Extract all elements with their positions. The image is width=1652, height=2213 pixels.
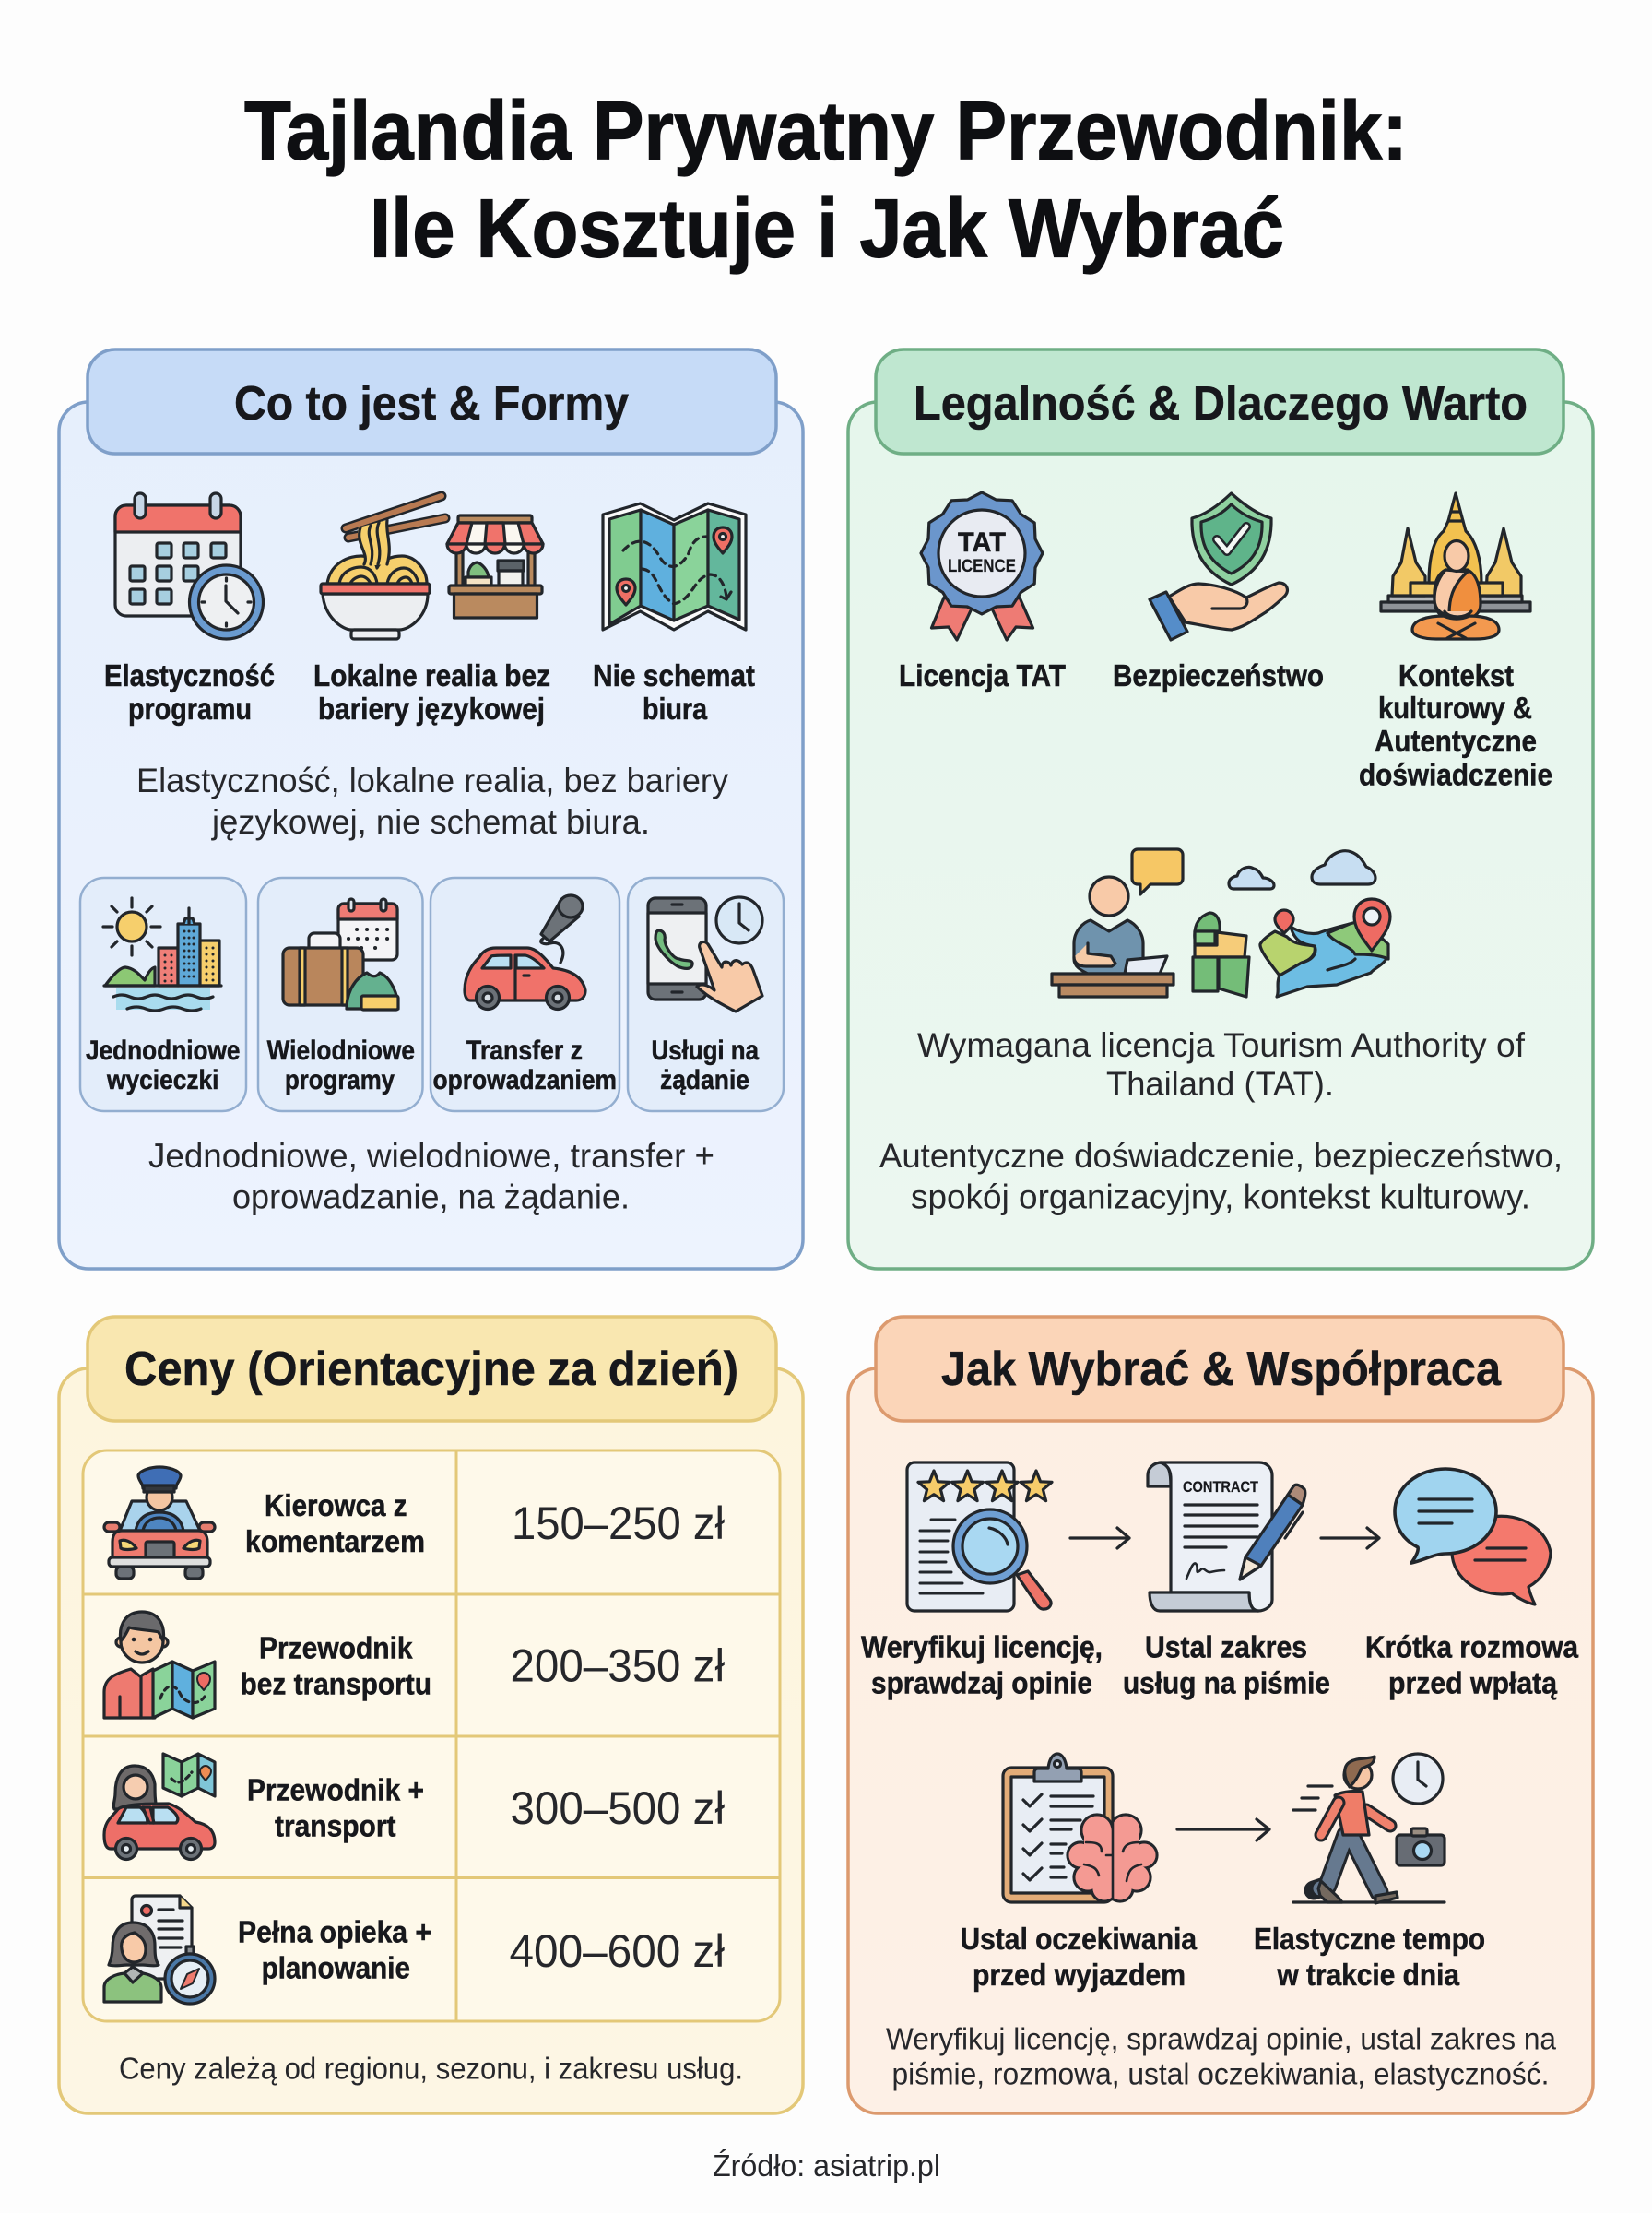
price: 400–600 zł [509,1925,725,1977]
label: Jednodniowe [86,1035,240,1066]
text block: forms summary 1: językowej, nie schemat biura. [211,803,650,841]
text block: forms summary 1: Elastyczność, lokalne realia, bez bariery [136,762,728,799]
label: Ustal oczekiwania przed wyjazdem [961,1922,1198,1992]
label [247,1772,424,1842]
label: Elastyczność programu: programu [128,692,252,726]
label: Licencja TAT: Licencja TAT [899,658,1066,692]
icon: contract with pen [1148,1462,1305,1611]
icon: phone, clock and hand [648,897,762,1012]
arrow [1177,1819,1269,1840]
label: żądanie [660,1065,749,1095]
arrow [1321,1528,1379,1548]
row: Pełna opieka + planowanie [104,1896,725,2004]
label: Elastyczne tempo w trakcie dnia: w trakcie dnia [1277,1958,1460,1992]
label: Lokalne realia bez bariery językowej: bariery językowej [318,692,545,726]
icon: suitcase, calendar and bag [283,899,398,1010]
icon: speech bubbles [1395,1469,1551,1604]
title [244,85,1408,275]
text block: forms summary 2: oprowadzanie, na żądanie. [232,1178,630,1215]
heading: Ceny (Orientacyjne za dzień): Ceny (Orientacyjne za dzień) [124,1343,738,1396]
panel: Co to jest & Formy [59,349,803,1269]
label: Nie schemat biura: biura [643,692,708,726]
label: oprowadzaniem [433,1065,617,1095]
icon: contract with pen: CONTRACT [1183,1478,1259,1496]
text block: forms summary 2 [148,1137,714,1215]
label [433,1035,617,1095]
row: Kierowca z komentarzem [104,1467,725,1579]
card: Transfer z oprowadzaniem [431,878,620,1111]
icon: calendar with clock [115,493,264,639]
label: transport [275,1809,396,1842]
label: Elastyczne tempo w trakcie dnia: Elastyczne tempo [1254,1922,1485,1956]
label: Kierowca z [265,1488,407,1522]
label [267,1035,415,1095]
label: bez transportu [240,1667,431,1700]
card: Jednodniowe wycieczki [80,878,246,1111]
text block: licence requirement [917,1026,1526,1103]
label: Ustal oczekiwania przed wyjazdem: przed wyjazdem [973,1958,1186,1992]
label: Krótka rozmowa przed wpłatą: przed wpłatą [1388,1665,1558,1700]
label: Elastyczność programu: Elastyczność [104,658,275,692]
icon: reviews under magnifier [907,1462,1052,1611]
label: Weryfikuj licencję, sprawdzaj opinie: Weryfikuj licencję, [861,1630,1103,1663]
heading: Ceny (Orientacyjne za dzień) [88,1317,776,1421]
label: Kontekst kulturowy & Autentyczne doświadczenie: Kontekst [1398,658,1514,692]
label: Wielodniowe [267,1035,415,1066]
heading: Legalność & Dlaczego Warto [876,349,1564,454]
label: Kontekst kulturowy & Autentyczne doświadczenie [1359,658,1552,791]
text block: price note: Ceny zależą od regionu, sezonu, i zakresu usług. [119,2052,743,2086]
heading: Co to jest & Formy [88,349,776,454]
text block: how to choose summary: Weryfikuj licencję, sprawdzaj opinie, ustal zakres na [886,2021,1557,2056]
heading: Jak Wybrać & Współpraca: Jak Wybrać & Współpraca [941,1343,1502,1396]
label: Ustal zakres usług na piśmie: Ustal zakres [1145,1630,1307,1663]
icon: TAT licence badge [921,492,1043,640]
source footer: Źródło: asiatrip.pl [713,2148,940,2183]
price: 150–250 zł [512,1497,725,1549]
icon: guide in car with map [104,1754,215,1859]
icon: shield in open hand [1150,493,1287,640]
label: Ustal oczekiwania przed wyjazdem: Ustal oczekiwania [961,1922,1198,1956]
card: Usługi na żądanie [628,878,784,1111]
title: Ile Kosztuje i Jak Wybrać [370,183,1284,275]
text block: how to choose summary [886,2021,1557,2091]
label: programy [285,1065,395,1095]
price table [83,1450,780,2021]
label: Krótka rozmowa przed wpłatą [1365,1630,1579,1700]
icon: TAT licence badge: LICENCE [948,557,1016,576]
label [238,1914,431,1984]
label: Kontekst kulturowy & Autentyczne doświadczenie: doświadczenie [1359,758,1552,791]
label: Transfer z [466,1035,583,1066]
label: Lokalne realia bez bariery językowej: Lokalne realia bez [313,658,550,692]
title: Tajlandia Prywatny Przewodnik: [244,85,1408,177]
icon: guide with map [104,1612,215,1718]
text block: licence requirement: Thailand (TAT). [1106,1065,1334,1103]
icon: TAT licence badge: TAT [958,527,1006,558]
label [245,1488,425,1558]
icon: folded map with route [603,503,746,630]
label: Ustal zakres usług na piśmie: usług na piśmie [1123,1665,1330,1700]
label: Nie schemat biura: Nie schemat [593,658,755,692]
text block: forms summary 2: Jednodniowe, wielodniowe, transfer + [148,1137,714,1175]
text block: benefits: Autentyczne doświadczenie, bezpieczeństwo, [879,1137,1563,1175]
icon: licensed guide at desk with Thailand map [1052,849,1390,997]
panel: Legalność & Dlaczego Warto [848,349,1593,1269]
label: komentarzem [245,1524,425,1558]
label: Przewodnik + [247,1772,424,1807]
label [240,1630,431,1700]
label: Pełna opieka + [238,1914,431,1949]
label [86,1035,240,1095]
panel: Jak Wybrać & Współpraca [848,1317,1593,2113]
row: Przewodnik bez transportu [104,1612,725,1718]
text block: licence requirement: Wymagana licencja Tourism Authority of [917,1026,1526,1064]
card: Wielodniowe programy [258,878,422,1111]
label: Krótka rozmowa przed wpłatą: Krótka rozmowa [1365,1630,1579,1663]
label: Lokalne realia bez bariery językowej [313,658,550,726]
label: Ustal zakres usług na piśmie [1123,1630,1330,1700]
label: Usługi na [651,1035,759,1066]
text block: benefits: spokój organizacyjny, kontekst kulturowy. [911,1178,1530,1215]
label: Weryfikuj licencję, sprawdzaj opinie: sprawdzaj opinie [871,1665,1092,1700]
label: planowanie [262,1951,410,1984]
icon: driver in car [104,1467,215,1579]
price: 200–350 zł [511,1639,725,1691]
price: 300–500 zł [511,1782,725,1834]
text block: forms summary 1 [136,762,728,841]
arrow [1070,1528,1129,1548]
icon: checklist with brain [1003,1754,1157,1902]
heading: Co to jest & Formy: Co to jest & Formy [234,377,629,431]
label: Przewodnik [259,1630,413,1665]
label: Bezpieczeństwo: Bezpieczeństwo [1113,658,1324,692]
icon: planner with document and compass [104,1896,215,2004]
label [651,1035,759,1095]
text block: benefits [879,1137,1563,1215]
label: Kontekst kulturowy & Autentyczne doświadczenie: kulturowy & [1378,691,1532,725]
label: Kontekst kulturowy & Autentyczne doświadczenie: Autentyczne [1375,724,1537,758]
icon: car with microphone [465,895,585,1009]
label: wycieczki [106,1065,219,1095]
row: Przewodnik + transport [104,1754,725,1859]
icon: sun, city and sea [103,898,221,1011]
heading: Legalność & Dlaczego Warto: Legalność & Dlaczego Warto [914,377,1528,431]
icon: temple and meditating monk [1381,493,1530,639]
text block: how to choose summary: piśmie, rozmowa, ustal oczekiwania, elastyczność. [892,2056,1549,2091]
label: Elastyczność programu [104,658,275,726]
icon: walking traveller with clock and camera [1293,1754,1445,1903]
heading: Jak Wybrać & Współpraca [876,1317,1564,1421]
label: Elastyczne tempo w trakcie dnia [1254,1922,1485,1992]
label: Weryfikuj licencję, sprawdzaj opinie [861,1630,1103,1700]
panel: Ceny [59,1317,803,2113]
icon: noodle bowl and street stall [321,496,543,639]
label: Nie schemat biura [593,658,755,726]
